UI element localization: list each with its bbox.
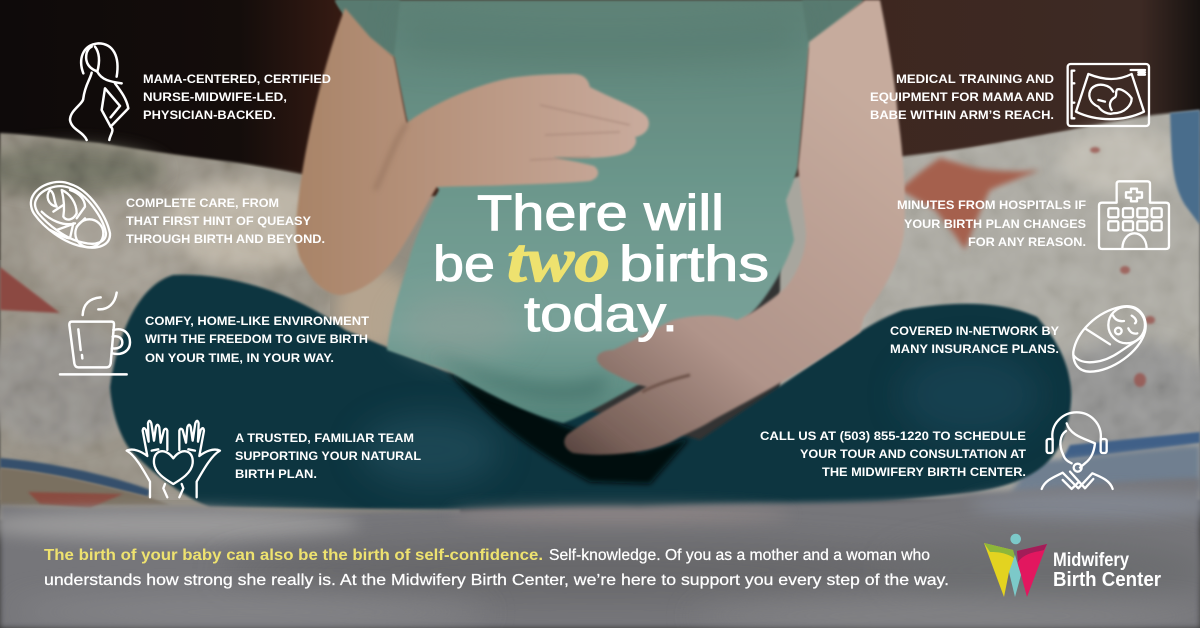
bottom message: Self-knowledge. Of you as a mother and a woman who [549,547,930,564]
benefit: medical training: MEDICAL TRAINING AND [896,72,1054,86]
icon: coffee cup [60,293,130,374]
title accent word: two [507,227,610,295]
foreground fog [0,478,1200,628]
benefit: complete care: THAT FIRST HINT OF QUEASY [126,214,311,228]
call to action: THE MIDWIFERY BIRTH CENTER. [822,465,1026,479]
title: be [433,236,495,292]
benefit: complete care [126,196,325,246]
title: today. [524,286,678,342]
benefit: home-like environment: ON YOUR TIME, IN YOUR WAY. [145,351,334,365]
jeans [110,275,1071,512]
benefit: complete care: THROUGH BIRTH AND BEYOND. [126,232,325,246]
logo: Midwifery Birth Center: Midwifery [1053,549,1129,571]
benefit: medical training [870,72,1054,122]
benefit: trusted team: A TRUSTED, FAMILIAR TEAM [235,431,414,445]
logo: Midwifery Birth Center [984,534,1161,597]
benefit: insurance: MANY INSURANCE PLANS. [890,342,1059,356]
quilt patches [1170,110,1200,225]
shirt [335,0,864,423]
bottom message: understands how strong she really is. At the Midwifery Birth Center, we’re here to support you every step of the way. [44,572,949,589]
icon: hands holding heart [127,421,220,497]
left arm and upper hand [296,8,649,295]
benefit: mama-centered: MAMA-CENTERED, CERTIFIED [143,72,331,86]
title [433,185,769,342]
benefit: home-like environment: COMFY, HOME-LIKE ENVIRONMENT [145,314,370,328]
icon: hospital [1099,181,1169,249]
shadow under belly [447,370,690,484]
bottom message: The birth of your baby can also be the birth of self-confidence. [44,547,543,564]
benefit: near hospitals: FOR ANY REASON. [968,235,1086,249]
title: There will [477,185,724,241]
icon: fetus in womb [31,182,110,248]
call to action: YOUR TOUR AND CONSULTATION AT [800,447,1027,461]
call to action [760,429,1027,479]
icon: pregnant woman [70,43,128,140]
benefit: complete care: COMPLETE CARE, FROM [126,196,279,210]
benefit: near hospitals: YOUR BIRTH PLAN CHANGES [904,217,1086,231]
benefit: trusted team: BIRTH PLAN. [235,467,317,481]
benefit: insurance [890,324,1059,356]
benefit: home-like environment [145,314,370,365]
benefit: medical training: BABE WITHIN ARM’S REACH. [870,108,1054,122]
benefit: trusted team [235,431,421,481]
call to action: CALL US AT (503) 855-1220 TO SCHEDULE [760,429,1026,443]
logo: Midwifery Birth Center: Birth Center [1053,568,1161,591]
bottom message [44,547,949,589]
benefit: near hospitals [897,198,1086,249]
benefit: mama-centered [143,72,331,122]
benefit: mama-centered: NURSE-MIDWIFE-LED, [143,90,287,104]
right arm and lower hand [564,0,905,455]
icon: call centre agent [1042,412,1113,489]
quilt right [780,110,1200,500]
benefit: home-like environment: WITH THE FREEDOM TO GIVE BIRTH [145,332,368,346]
benefit: trusted team: SUPPORTING YOUR NATURAL [235,449,421,463]
title: births [619,236,769,292]
icon: ultrasound screen [1068,64,1149,126]
icon: swaddled baby [1073,306,1146,372]
benefit: medical training: EQUIPMENT FOR MAMA AND [870,90,1054,104]
benefit: near hospitals: MINUTES FROM HOSPITALS IF [897,198,1086,212]
benefit: mama-centered: PHYSICIAN-BACKED. [143,108,276,122]
quilt left [0,133,460,520]
benefit: insurance: COVERED IN-NETWORK BY [890,324,1059,338]
